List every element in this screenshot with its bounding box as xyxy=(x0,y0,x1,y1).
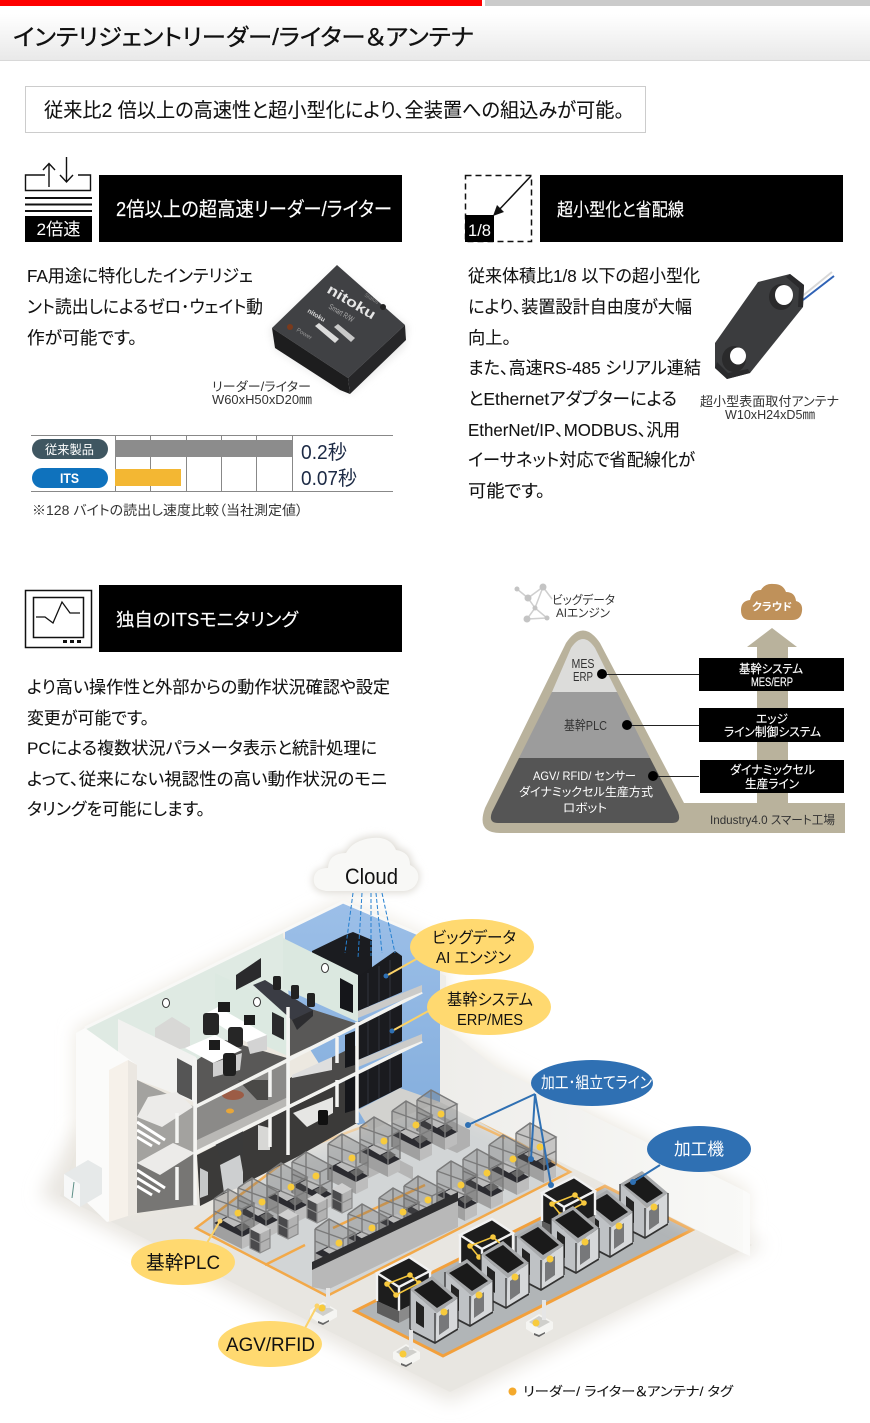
heading: high speed xyxy=(99,175,402,242)
pyramid layer: field devices xyxy=(491,758,679,823)
bar: conventional xyxy=(32,439,347,464)
box: edge: ライン制御システム xyxy=(724,724,821,739)
photo: reader writer: Power xyxy=(295,328,313,341)
bar: ITS xyxy=(32,467,357,490)
callout: machining xyxy=(647,1126,751,1172)
cloud: Cloud xyxy=(345,864,398,889)
callout: AGV RFID xyxy=(218,1321,322,1367)
lead message box xyxy=(26,86,646,132)
lead message box: 従来比2 倍以上の高速性と超小型化により、全装置への組込みが可能。 xyxy=(44,99,624,122)
caption: reader writer xyxy=(212,379,312,407)
building shadow xyxy=(76,900,748,1250)
cloud data links xyxy=(345,893,395,958)
text block: miniaturization: イーサネット対応で省配線化が xyxy=(468,450,696,470)
server racks xyxy=(345,951,402,1113)
icon: big data network xyxy=(514,584,552,622)
factory ground xyxy=(40,1090,765,1402)
callout: PLC xyxy=(131,1239,235,1285)
assembly line: back row xyxy=(214,1090,470,1253)
pyramid layer: PLC xyxy=(519,692,650,758)
pyramid layer: field devices: ロボット xyxy=(563,801,607,815)
AGV robots xyxy=(310,1288,553,1367)
callout: big data xyxy=(410,919,534,975)
top floor back wall xyxy=(85,933,290,1075)
icon: monitor xyxy=(26,590,92,648)
photo: antenna xyxy=(715,272,834,379)
reader dots xyxy=(234,1110,658,1358)
left floor landings and stairs xyxy=(137,1080,195,1213)
heading: high speed: 2倍以上の超高速リーダー/ライター xyxy=(116,198,392,221)
meeting room xyxy=(162,958,328,1030)
band label: Industry4.0 スマート工場 xyxy=(710,813,835,827)
text block: miniaturization: 可能です。 xyxy=(468,481,545,501)
text block: ITS monitoring: よって、従来にない視認性の高い動作状況のモニ xyxy=(27,770,387,789)
box: dynamic cell: ダイナミックセル xyxy=(730,762,815,777)
white perimeter wall xyxy=(440,973,750,1256)
connector lines xyxy=(597,669,699,781)
icon: one eighth xyxy=(465,176,532,242)
desks lower floors xyxy=(200,1057,333,1198)
label: big data AI engine: ビッグデータ xyxy=(552,592,615,607)
bar: conventional: 0.2秒 xyxy=(301,441,347,464)
illustration: smart factory xyxy=(40,836,765,1402)
title band xyxy=(0,14,870,61)
pyramid layer: field devices: AGV/ RFID/ センサー xyxy=(533,769,636,783)
server room blue wall xyxy=(285,902,440,1125)
text block: high speed: ント読出しによるゼロ･ウェイト動 xyxy=(27,297,263,317)
assembly line: long bench xyxy=(312,1176,458,1290)
text block: ITS monitoring: より高い操作性と外部からの動作状況確認や設定 xyxy=(27,678,390,697)
photo: reader writer: Status xyxy=(363,293,380,306)
caption: antenna xyxy=(700,394,839,422)
callout: big data: AI エンジン xyxy=(436,950,511,967)
white office wall xyxy=(118,1019,196,1103)
text block: miniaturization: 向上。 xyxy=(468,328,511,348)
caption: reader writer: リーダー/ライター xyxy=(212,379,311,394)
box: edge: エッジ xyxy=(756,712,788,726)
callout: big data: ビッグデータ xyxy=(432,928,516,947)
panel: high speed xyxy=(25,157,408,518)
pyramid layer: field devices: ダイナミックセル生産方式 xyxy=(519,784,653,799)
centre green partition xyxy=(215,973,290,1057)
callout: AGV RFID: AGV/RFID xyxy=(226,1335,315,1356)
box: dynamic cell: 生産ライン xyxy=(745,777,800,791)
heading: miniaturization: 超小型化と省配線 xyxy=(557,200,684,220)
panel: ITS monitoring xyxy=(26,585,402,819)
floor slabs xyxy=(177,985,440,1205)
label: big data AI engine xyxy=(552,592,615,620)
text block: high speed xyxy=(27,266,263,348)
text block: high speed: 作が可能です。 xyxy=(27,328,137,348)
office furniture xyxy=(155,1002,267,1114)
stair block xyxy=(76,1028,137,1222)
icon: double speed: 2倍速 xyxy=(36,220,80,239)
callout: PLC: 基幹PLC xyxy=(146,1252,220,1274)
pyramid layer: PLC: 基幹PLC xyxy=(564,718,607,733)
rising arrow xyxy=(747,628,797,803)
chart footnote: ※128 バイトの読出し速度比較（当社測定値） xyxy=(32,503,303,518)
text block: miniaturization: また、高速RS-485 シリアル連結 xyxy=(468,358,701,378)
doorway xyxy=(177,1058,192,1100)
text block: ITS monitoring: PCによる複数状況パラメータ表示と統計処理に xyxy=(27,739,377,758)
pyramid layer: MES ERP: MES xyxy=(572,656,595,671)
photo: reader writer: nitoku xyxy=(324,281,379,322)
icon: one eighth: 1/8 xyxy=(468,221,491,240)
heading: ITS monitoring xyxy=(99,585,402,652)
box: core systems: 基幹システム xyxy=(739,662,803,676)
photo: reader writer xyxy=(270,265,408,394)
panel: miniaturization xyxy=(465,175,843,501)
bar: ITS: ITS xyxy=(60,470,79,486)
box: dynamic cell xyxy=(700,760,844,793)
callout: core systems: 基幹システム xyxy=(447,991,533,1009)
roof edge xyxy=(85,902,440,1028)
AC unit xyxy=(64,1160,102,1207)
label: big data AI engine: AIエンジン xyxy=(556,606,611,620)
text block: miniaturization: により、装置設計自由度が大幅 xyxy=(468,297,692,317)
bar chart: read speed xyxy=(31,435,393,492)
diagram: industry 4.0 pyramid xyxy=(483,584,845,833)
legend: リーダー/ ライター＆アンテナ/ タグ xyxy=(523,1384,734,1399)
callout: machining: 加工機 xyxy=(674,1140,724,1159)
machining cells xyxy=(377,1171,668,1344)
box: core systems xyxy=(699,658,844,691)
pyramid layer: MES ERP xyxy=(552,639,617,692)
callout: assembly line xyxy=(531,1060,653,1106)
bar: ITS: 0.07秒 xyxy=(301,467,357,490)
title band: インテリジェントリーダー/ライター＆アンテナ xyxy=(13,24,474,50)
caption: antenna: 超小型表面取付アンテナ xyxy=(700,394,839,409)
text block: ITS monitoring xyxy=(27,678,390,819)
box: core systems: MES/ERP xyxy=(751,675,793,689)
assembly line: right row xyxy=(437,1123,556,1221)
text block: miniaturization: EtherNet/IP、MODBUS、汎用 xyxy=(468,420,680,440)
photo: reader writer: nitoku xyxy=(306,308,326,324)
top accent bar xyxy=(0,0,870,6)
bar: conventional: 従来製品 xyxy=(45,443,94,457)
heading: ITS monitoring: 独自のITSモニタリング xyxy=(116,610,299,630)
caption: antenna: W10xH24xD5㎜ xyxy=(725,407,815,422)
callout: core systems xyxy=(427,979,551,1035)
heading: miniaturization xyxy=(540,175,843,242)
photo: reader writer: Smart R/W xyxy=(327,302,356,324)
leader lines xyxy=(204,957,660,1330)
pyramid layer: MES ERP: ERP xyxy=(573,669,593,684)
back rack group xyxy=(312,932,372,985)
callout: assembly line: 加工･組立てライン xyxy=(541,1074,652,1092)
icon: double speed xyxy=(25,157,92,242)
text block: miniaturization: 従来体積比1/8 以下の超小型化 xyxy=(468,266,700,286)
pyramid outline xyxy=(483,630,845,833)
caption: reader writer: W60xH50xD20㎜ xyxy=(212,392,312,407)
text block: miniaturization: とEthernetアダプターによる xyxy=(468,389,677,409)
text block: ITS monitoring: 変更が可能です。 xyxy=(27,709,149,728)
right green partition xyxy=(283,938,358,1022)
cloud xyxy=(313,836,420,893)
icon: brown cloud: クラウド xyxy=(752,601,792,613)
icon: brown cloud xyxy=(741,584,802,620)
text block: high speed: FA用途に特化したインテリジェ xyxy=(27,266,253,286)
text block: ITS monitoring: タリングを可能にします。 xyxy=(27,800,205,819)
callout: core systems: ERP/MES xyxy=(457,1012,523,1029)
text block: miniaturization xyxy=(468,266,701,501)
box: edge xyxy=(699,708,844,742)
upper floor surfaces xyxy=(197,1000,358,1206)
